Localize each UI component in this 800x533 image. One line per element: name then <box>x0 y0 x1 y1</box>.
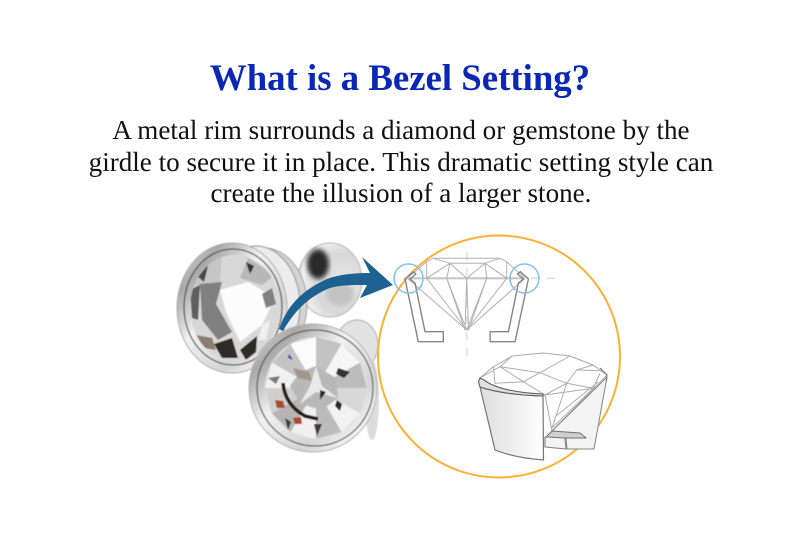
diagram: 3D cutaway setting <box>478 353 607 460</box>
description text: girdle to secure it in place. This dramatic setting style can <box>89 146 713 176</box>
back earring post ball <box>298 243 362 317</box>
bezel rim <box>478 378 543 396</box>
back diamond facets <box>190 255 278 360</box>
photo: bezel stud earrings <box>177 243 379 452</box>
stone facets <box>480 356 603 428</box>
centre dashed axes <box>403 252 562 360</box>
right bezel wall <box>490 272 528 342</box>
description text <box>89 115 713 208</box>
front earring post ball <box>336 320 378 370</box>
left bezel wall <box>405 272 443 342</box>
description text: create the illusion of a larger stone. <box>211 178 591 208</box>
arrow <box>279 257 393 331</box>
back earring <box>177 243 362 373</box>
bezel outer wall <box>480 387 544 460</box>
magnifier circle <box>378 236 620 478</box>
setting seat and right wall <box>552 377 607 449</box>
right highlight circle <box>510 264 539 293</box>
back earring skirt <box>221 248 307 360</box>
title: What is a Bezel Setting? <box>210 57 590 98</box>
setting step <box>545 437 566 449</box>
front earring <box>249 320 379 452</box>
diamond outline and facets <box>407 258 525 330</box>
left highlight circle <box>394 264 423 293</box>
front diamond facets <box>264 336 367 439</box>
description text: A metal rim surrounds a diamond or gemstone by the <box>112 115 690 145</box>
stone crown <box>480 353 607 431</box>
diagram: bezel cross-section <box>394 252 562 360</box>
